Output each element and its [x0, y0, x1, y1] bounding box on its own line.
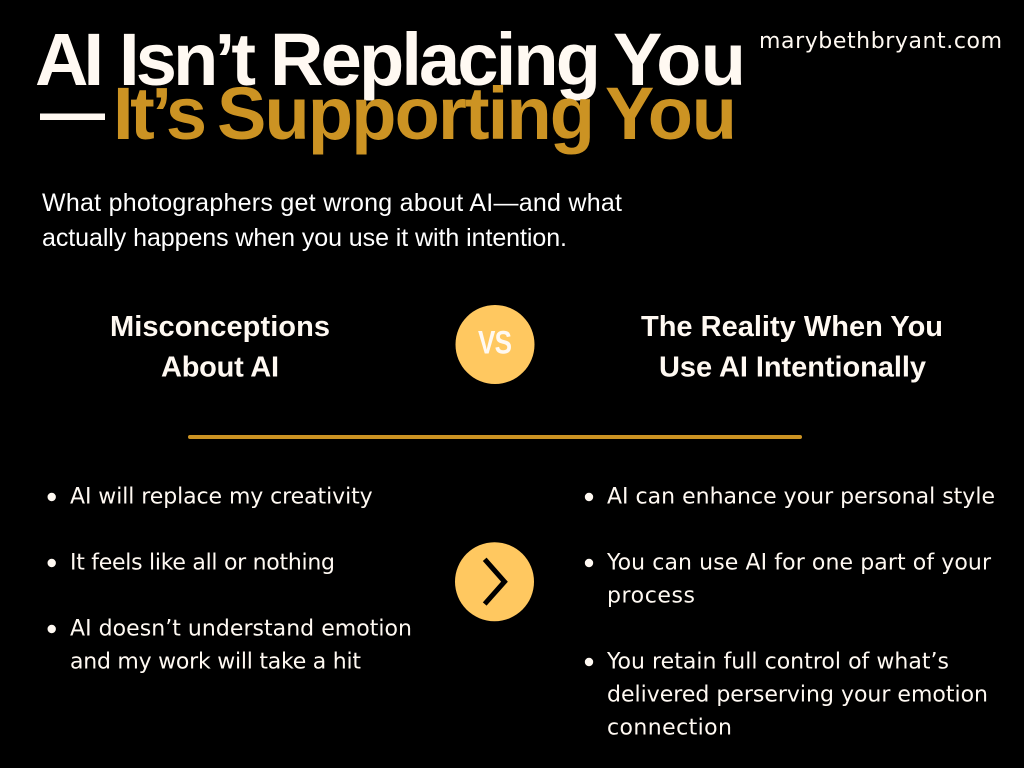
bullet: emotion: AI doesn’t understand emotion	[70, 616, 412, 642]
right heading: Use AI Intentionally	[659, 352, 926, 384]
divider line	[188, 435, 802, 439]
bullet: one part	[585, 550, 992, 608]
left heading: About AI	[161, 352, 279, 384]
bullet: emotion: and my work will take a hit	[70, 650, 361, 674]
subtitle: actually happens when you use it with intention.	[42, 224, 567, 252]
title line 1: You	[613, 18, 746, 101]
title line 2: It’s	[113, 72, 207, 155]
bullet: one part: process	[607, 584, 695, 608]
right heading	[641, 311, 943, 384]
title line 2: —	[40, 75, 105, 148]
title line 1: Isn’t	[119, 18, 256, 101]
title line 2	[40, 72, 737, 155]
subtitle	[42, 189, 622, 252]
bullet: full control: You retain full control of what’s	[606, 650, 949, 674]
right heading: The Reality When You	[641, 311, 943, 343]
left heading	[110, 311, 330, 384]
bullet: full control	[585, 650, 988, 740]
title line 1: AI	[35, 18, 104, 101]
vs badge	[456, 305, 534, 384]
bullet: emotion	[48, 616, 412, 674]
vs badge: VS	[478, 325, 512, 361]
left heading: Misconceptions	[110, 311, 330, 343]
bullet: full control: delivered perserving your emotion	[607, 682, 988, 708]
subtitle: What photographers get wrong about AI—and what	[42, 189, 622, 217]
title line 2: Supporting	[217, 72, 595, 155]
title line 1	[35, 18, 746, 101]
bullet: creativity: AI will replace my creativity	[70, 484, 373, 510]
title line 1: Replacing	[270, 18, 601, 101]
right list	[585, 484, 995, 740]
title line 2: You	[605, 72, 737, 155]
bullet: personal style: AI can enhance your personal style	[607, 484, 995, 510]
website url: marybethbryant.com	[759, 29, 1002, 54]
bullet: one part: You can use AI for one part of your	[606, 550, 992, 576]
bullet: all or nothing: It feels like all or nothing	[70, 550, 335, 576]
arrow badge	[455, 542, 534, 621]
bullet: full control: connection	[607, 716, 732, 740]
left list	[48, 484, 412, 674]
